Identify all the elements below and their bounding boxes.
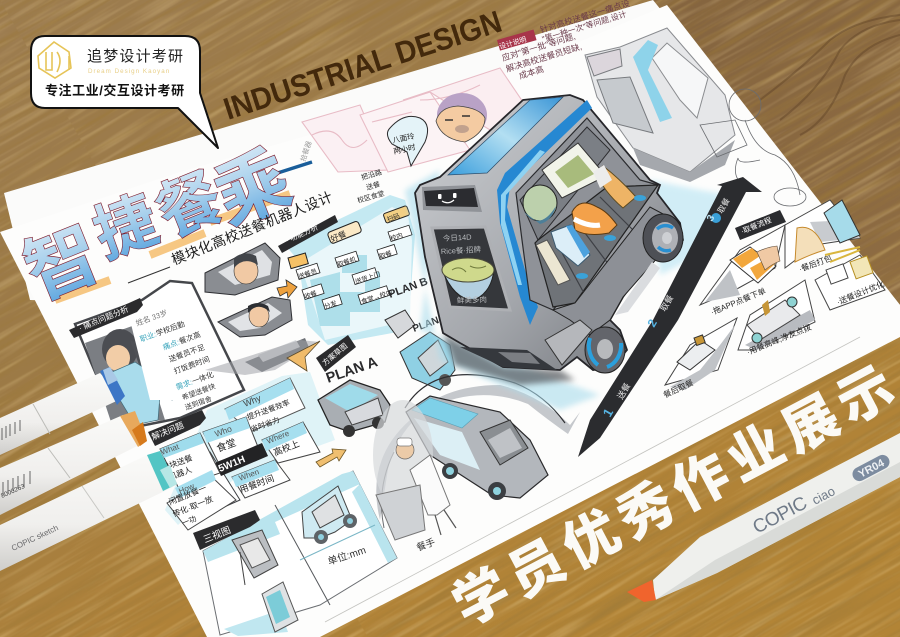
tag: three views: 三视图 [202, 524, 233, 546]
tagline: 专注工业/交互设计考研 [45, 83, 185, 98]
card: when: When [238, 467, 260, 483]
ring: dial shadow [376, 375, 580, 528]
function nodes: 校内 [389, 230, 404, 243]
card: why [225, 378, 305, 434]
card: how: 闲置放餐一 [167, 483, 208, 507]
function nodes: 送货上门 [354, 269, 381, 286]
robot body [415, 95, 683, 370]
tag: problem: 解决问题 [150, 420, 186, 442]
header tag [69, 298, 143, 338]
food bread [596, 166, 636, 208]
note: unit: 单位:mm [326, 543, 367, 568]
card: phone ordering: ·拖APP点餐下单 [709, 286, 767, 317]
marker pen: COPIC ciao: ciao [809, 483, 838, 508]
card: who [203, 417, 258, 462]
card: what: What [160, 442, 181, 457]
window frame [516, 118, 658, 310]
text block: pink notes: 成本高 [518, 64, 545, 81]
step 3 [705, 197, 732, 224]
card: robot in path: ·用餐高峰,净友点拨 [745, 322, 813, 357]
illustration: girl [102, 329, 172, 425]
card: why: Why [242, 393, 263, 409]
note list [130, 295, 217, 412]
note list: 职业:学校后勤 [138, 318, 186, 344]
small notes beside title: 校区食堂 [356, 189, 385, 205]
step 1 [600, 381, 632, 420]
menu screen [432, 227, 510, 310]
heading: INDUSTRIAL DESIGN: INDUSTRIAL DESIGN [219, 4, 506, 127]
panel: PLAN B: PLAN B [387, 276, 430, 301]
function nodes: 收餐 [303, 288, 318, 301]
card: how: 一功 [180, 513, 198, 528]
figure: chef [373, 400, 456, 554]
marker: teal: COPIC sketch [10, 523, 60, 553]
marker: orange [0, 411, 147, 515]
brand name: 追梦设计考研 [87, 48, 184, 65]
tag: function [278, 215, 338, 253]
card: coffee: ·餐后打包 [797, 253, 833, 274]
panel: PLAN A: PLAN A [324, 354, 380, 387]
card: cups [815, 247, 886, 310]
lower body panel [460, 207, 680, 370]
face display [422, 185, 482, 212]
card: who: 食堂 [215, 436, 238, 455]
card: who: Who [213, 423, 233, 439]
card: what: 模块送餐 [160, 453, 194, 473]
card: how [167, 470, 236, 530]
subtitle: 模块化高校送餐机器人设计 [169, 189, 335, 268]
arrow: orange to plan A [287, 341, 320, 371]
note list: 送餐员不足 [167, 341, 206, 364]
food tray [542, 143, 606, 198]
back paper sheet [4, 0, 900, 320]
menu screen: Rice餐·招牌 [441, 244, 482, 256]
food sushi [572, 203, 617, 234]
function nodes: 取餐机 [336, 254, 358, 269]
tag: flow: ·取餐流程 [739, 214, 773, 236]
step 2 [644, 293, 675, 330]
title: 智捷餐乘 [7, 119, 312, 319]
drawing: side view [302, 486, 357, 544]
speech bubble note [387, 116, 428, 166]
nib [627, 580, 656, 602]
subtitle [128, 189, 335, 283]
card: when: 用餐时间 [238, 472, 276, 495]
title orange strokes [55, 162, 312, 300]
marker: orange: 8000263 [0, 483, 26, 500]
card: cups: ·送餐设计优化 [835, 279, 886, 307]
drawing: front view [232, 530, 278, 585]
panel: 5W1H [148, 372, 335, 530]
drawing: van B [400, 332, 455, 390]
title: 智捷餐乘: 餐 [141, 146, 234, 256]
food window [520, 127, 658, 307]
card: coffee [785, 200, 860, 274]
light roof [448, 97, 563, 175]
drawing: van A [318, 380, 390, 437]
title: 智捷餐乘: 智 [7, 195, 113, 319]
wheel lower [585, 327, 625, 373]
food milk carton [551, 225, 590, 266]
panel: PLAN A [316, 335, 390, 437]
card: when [232, 460, 290, 498]
tag: problem [148, 410, 206, 446]
function nodes [288, 205, 412, 311]
text block: pink notes: 应对"第一批"等问题, [501, 31, 577, 63]
tag: flow [735, 210, 786, 240]
function nodes: 扫码 [386, 211, 401, 224]
header tag: · 痛点问题分析 [77, 304, 130, 333]
note list: 送到宿舍 [184, 394, 213, 412]
text block: pink notes: "第一种一次"等问题,设计 [541, 9, 628, 44]
process arrow band [578, 177, 762, 457]
robot shadow [405, 170, 600, 410]
card: where [262, 422, 320, 463]
text block: pink notes [497, 0, 631, 81]
panel: question definition [69, 281, 244, 430]
card: how: 传化·取一放 [171, 494, 214, 519]
speech bubble note: 八面玲 [391, 130, 416, 145]
badge: 5W1H: 5W1H [217, 454, 247, 475]
tray markers [634, 195, 646, 201]
card: pick up meal [662, 318, 737, 400]
panel: usage flow [662, 200, 886, 400]
sketch: second robot back view [585, 28, 806, 206]
step 3: 取餐 [716, 197, 732, 215]
marker pen: COPIC ciao [627, 433, 900, 602]
panel: PLAN B: PLAN [411, 315, 441, 335]
function nodes: 取餐 [378, 248, 393, 261]
step 2: 2 [644, 316, 660, 330]
marker: blue [0, 367, 125, 455]
speech bubble note: 两小时 [392, 141, 417, 156]
colour code badge [850, 452, 892, 484]
food bottle [536, 240, 570, 285]
sketch: character head [436, 93, 487, 142]
card: phone ordering [700, 225, 785, 317]
arrow: orange to 5W1H [316, 449, 346, 467]
card: pick up meal: 餐后取餐 [662, 377, 695, 400]
figure: chef: 餐手 [415, 536, 437, 554]
small notes beside title: 送餐 [365, 179, 381, 192]
text block: pink notes: 解决高校送餐员短缺, [505, 41, 583, 74]
note list: 痛点:餐次高 [161, 329, 202, 352]
function nodes: 送餐员 [297, 266, 319, 281]
small notes beside title: 拾餐器 [298, 140, 313, 163]
step 1: 送餐 [615, 381, 632, 401]
title: 智捷餐乘: 乘 [196, 119, 305, 246]
marker pen group [0, 367, 177, 571]
note list: 打饭费时间 [172, 354, 211, 376]
function nodes: 分发 [323, 298, 338, 311]
card: where: 高校上 [272, 438, 301, 458]
colour code badge: YR04 [856, 457, 887, 481]
step 2: 取餐 [658, 293, 675, 313]
illustration: delivery robot [405, 95, 730, 410]
card: what [160, 433, 220, 487]
menu screen: 今日14D [443, 231, 472, 243]
card: what: 机器人 [167, 464, 193, 482]
card: why: 提升送餐效率 [245, 397, 291, 422]
function nodes: 好餐 [329, 229, 348, 244]
small notes beside title [298, 140, 385, 205]
panel: interview bubbles [205, 243, 320, 375]
badge: 5W1H [215, 443, 268, 476]
brand label: COPIC [750, 493, 810, 538]
small notes beside title: 把沿路 [360, 167, 383, 182]
brand english: Dream Design Kaoyan [88, 68, 170, 75]
title: 智捷餐乘: 捷 [79, 169, 168, 275]
note list: 需求:一体化 [174, 369, 215, 392]
step 3: 3 [705, 213, 718, 224]
card: where: Where [265, 428, 291, 446]
card: why: 省时省力 [249, 414, 281, 434]
menu screen: 鲜美多肉 [457, 294, 487, 305]
paper inner rule [325, 337, 860, 622]
panel: PLAN A: 方案草图 [320, 341, 349, 368]
text block: pink notes: 设计说明 [498, 35, 527, 51]
panel: function structure [278, 195, 415, 345]
pink background sketches [302, 68, 525, 172]
blue side stripe [497, 100, 592, 325]
logo bubble [31, 36, 218, 148]
sketch: cartoon mascot outlines [700, 89, 806, 206]
wheel right [643, 214, 683, 262]
arrow: orange to function [277, 280, 297, 298]
note list: 希望送餐快 [181, 381, 217, 402]
logo mark [38, 42, 71, 78]
card: robot in path [738, 280, 815, 357]
card: how: How [177, 481, 196, 496]
panel: three views [193, 471, 397, 636]
marker: teal [0, 451, 177, 571]
drawing: rear view [262, 582, 298, 632]
panel: PLAN B [385, 276, 455, 390]
function nodes: 食堂→校内 [360, 287, 394, 306]
note list: 姓名 33岁 [134, 307, 169, 328]
tag: function: · 功能分析 [284, 221, 320, 245]
lower van [406, 396, 548, 500]
step 1: 1 [600, 406, 616, 420]
food bowl [523, 185, 557, 221]
tag: three views [193, 510, 260, 550]
